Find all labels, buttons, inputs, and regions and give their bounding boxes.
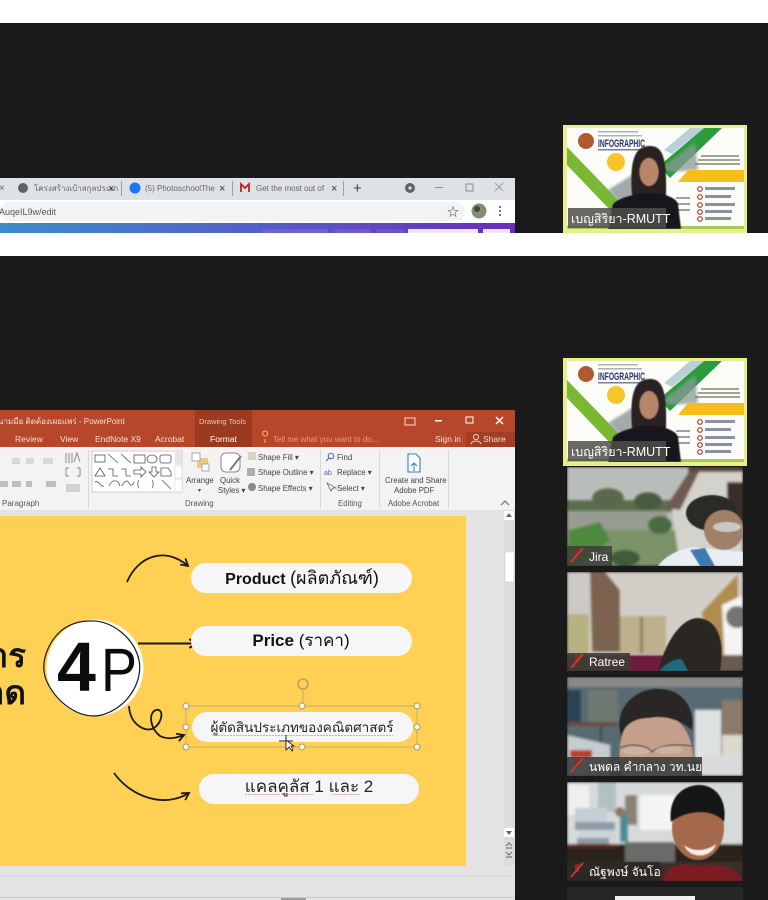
browser tabs bbox=[0, 180, 362, 197]
slide: 4P marketing bbox=[0, 516, 466, 866]
poster logo bbox=[578, 133, 594, 149]
poster yellow circle bbox=[607, 386, 625, 404]
drawing group labels: Drawing bbox=[185, 499, 214, 508]
pill: price bbox=[191, 626, 412, 656]
participant tile: Jira bbox=[567, 467, 744, 566]
browser tabs: โครงสร้างเบ้าสกุลประเภ bbox=[34, 183, 118, 193]
editing group bbox=[324, 450, 380, 508]
scrollbar bbox=[504, 510, 515, 865]
muted mic icon bbox=[571, 863, 583, 877]
browser tabs: × bbox=[219, 183, 225, 195]
address bar icons bbox=[447, 204, 501, 219]
ribbon tabs: Tell me what you want to do... bbox=[273, 435, 378, 444]
ribbon tabs: View bbox=[60, 434, 79, 444]
poster date text bbox=[695, 155, 740, 165]
participant tile: third student: นพดล คำกลาง วท.นย bbox=[589, 760, 702, 774]
editing group: Select ▾ bbox=[337, 484, 365, 493]
4P circle: 4 bbox=[57, 628, 96, 706]
arrow to price bbox=[138, 642, 197, 644]
top dark screen band bbox=[0, 23, 768, 233]
participant tile: third student bbox=[567, 677, 743, 776]
status bar lines bbox=[0, 875, 515, 900]
adobe acrobat group: Adobe PDF bbox=[394, 486, 435, 495]
selection frame and handles bbox=[183, 679, 420, 750]
participant tile: Jira: Jira bbox=[589, 550, 609, 564]
quick styles icon bbox=[221, 453, 241, 472]
drawing group labels: Styles ▾ bbox=[218, 486, 245, 495]
presenter video tile: top bbox=[563, 125, 747, 233]
adobe acrobat group: Create and Share bbox=[385, 476, 447, 485]
participant tile: Ratree: Ratree bbox=[589, 655, 625, 669]
editor canvas bbox=[0, 510, 515, 900]
pill: selected text box bbox=[192, 712, 413, 742]
pill: calculus bbox=[199, 774, 419, 804]
browser tabs: + bbox=[353, 180, 362, 197]
muted mic icon bbox=[571, 548, 583, 562]
muted mic icon bbox=[571, 758, 583, 772]
editing group: Replace ▾ bbox=[337, 468, 372, 477]
name label bbox=[567, 862, 660, 881]
pill: price: Price (ราคา) bbox=[252, 631, 350, 650]
address bar icons: ☆ bbox=[447, 205, 459, 219]
poster heading: INFOGRAPHIC bbox=[598, 371, 645, 383]
presenter video tile: lower: เบญสิริยา-RMUTT bbox=[571, 445, 671, 459]
paragraph group bbox=[0, 450, 89, 508]
title bar: Drawing Tools bbox=[199, 417, 246, 426]
shape commands: Shape Outline ▾ bbox=[258, 468, 314, 477]
looped arrow to third item bbox=[129, 706, 184, 738]
paragraph group: Paragraph bbox=[2, 499, 39, 508]
arrow to fourth item bbox=[114, 773, 189, 800]
drawing group labels: ▾ bbox=[198, 488, 201, 494]
participant tile: fourth student: ณัฐพงษ์ จันโอ bbox=[589, 865, 661, 879]
poster yellow band bbox=[678, 403, 745, 415]
poster green diagonal stripe bbox=[567, 147, 622, 212]
ribbon tabs: Acrobat bbox=[155, 434, 185, 444]
address bar text: AuqeIL9w/edit bbox=[0, 207, 57, 217]
poster yellow circle bbox=[607, 153, 625, 171]
editing group: ab bbox=[324, 470, 332, 477]
participant tile: Ratree bbox=[567, 572, 748, 671]
browser tabs: (5) PhotoschoolThe bbox=[145, 184, 215, 193]
shape commands: Shape Fill ▾ bbox=[258, 453, 299, 462]
mouse cursor bbox=[279, 735, 294, 751]
participant tile: fourth student bbox=[567, 782, 743, 881]
drawing group labels: Quick bbox=[220, 476, 240, 485]
browser window controls bbox=[405, 183, 503, 193]
poster date text bbox=[695, 388, 740, 398]
slide title, cropped at edge bbox=[0, 637, 26, 711]
ribbon tabs: EndNote X9 bbox=[95, 434, 141, 444]
drawing group labels bbox=[185, 476, 245, 508]
presenter video tile: top: เบญสิริยา-RMUTT bbox=[571, 212, 671, 226]
pill: selected text box: ผู้ตัดสินประเภทของคณิตศาสตร์ bbox=[210, 719, 394, 736]
name label bbox=[567, 653, 630, 671]
browser tabs: Get the most out of bbox=[256, 184, 325, 193]
ribbon body bbox=[0, 447, 515, 510]
pill: product bbox=[191, 563, 412, 593]
pill: product: Product (ผลิตภัณฑ์) bbox=[225, 568, 379, 588]
name label bbox=[568, 441, 666, 461]
shape commands: Shape Effects ▾ bbox=[258, 484, 313, 493]
ribbon tabs: Share bbox=[483, 434, 506, 444]
editing group: Editing bbox=[338, 499, 362, 508]
title bar: นามมือ ติดต้องเผยแพร่ - PowerPoint bbox=[0, 417, 125, 426]
browser tabs: × bbox=[331, 183, 337, 195]
muted mic icon bbox=[571, 654, 583, 668]
poster yellow band bbox=[678, 170, 745, 182]
poster course list bbox=[676, 187, 735, 221]
title bar bbox=[0, 410, 515, 447]
browser tabs: × bbox=[108, 183, 114, 195]
shape gallery bbox=[92, 451, 182, 492]
ribbon tabs bbox=[15, 431, 506, 444]
name label bbox=[568, 208, 666, 228]
participant tile: cropped fifth bbox=[567, 887, 743, 900]
shape commands bbox=[247, 450, 321, 508]
arrow to product bbox=[127, 555, 188, 582]
arrange icon bbox=[192, 453, 209, 471]
poster logo bbox=[578, 366, 594, 382]
lower dark screen band bbox=[0, 256, 768, 900]
poster green diagonal stripe bbox=[567, 380, 622, 445]
poster heading: INFOGRAPHIC bbox=[598, 138, 645, 150]
poster course list bbox=[676, 420, 735, 454]
adobe acrobat group bbox=[385, 450, 509, 508]
browser window strip bbox=[0, 178, 515, 233]
ribbon tabs: Review bbox=[15, 434, 44, 444]
presenter video tile: lower bbox=[563, 358, 747, 466]
name label bbox=[567, 757, 702, 776]
4P circle: P bbox=[101, 636, 137, 704]
ribbon tabs: Format bbox=[210, 434, 238, 444]
drawing group labels: Arrange bbox=[186, 476, 214, 485]
pill: calculus: แคลคูลัส 1 และ 2 bbox=[245, 777, 373, 797]
adobe acrobat group: Adobe Acrobat bbox=[388, 499, 440, 508]
editing group: Find bbox=[337, 453, 352, 462]
4P circle bbox=[44, 620, 144, 716]
ribbon tabs: Sign in bbox=[435, 434, 461, 444]
presenter person bbox=[608, 146, 681, 229]
name label bbox=[567, 546, 612, 566]
presenter person bbox=[608, 379, 681, 462]
PowerPoint window bbox=[0, 410, 515, 900]
